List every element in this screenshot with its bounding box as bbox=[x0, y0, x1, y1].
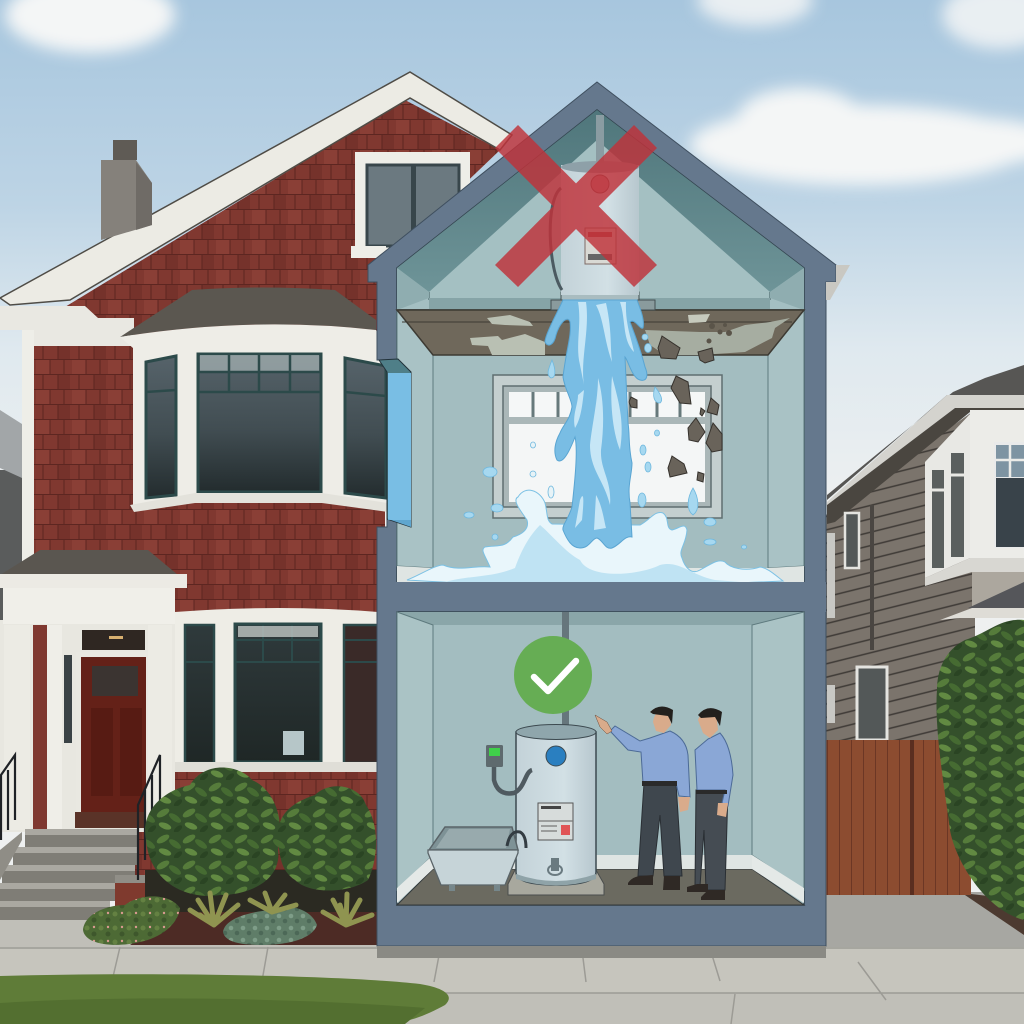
red X mark over attic heater bbox=[495, 125, 657, 287]
lower floor slab band bbox=[387, 582, 826, 612]
leaking side duct bbox=[379, 359, 411, 527]
garden bed shadow and mulch bbox=[130, 870, 378, 945]
splash pool bbox=[407, 490, 783, 586]
main water column bbox=[545, 300, 647, 548]
neighbor bay windows bbox=[925, 410, 1024, 608]
droplets bbox=[464, 334, 746, 549]
ground: sidewalk, driveway and lawn bbox=[0, 892, 1024, 1024]
right neighbor house bbox=[826, 365, 1024, 745]
shirt and arm bbox=[610, 726, 690, 797]
ground floor room bbox=[397, 612, 804, 905]
second technician bbox=[687, 708, 733, 900]
falling debris bbox=[629, 336, 722, 482]
clouds bbox=[5, 0, 1024, 185]
attic window bbox=[351, 152, 470, 258]
neighbor siding wall bbox=[826, 410, 975, 745]
drain pan bbox=[428, 827, 526, 891]
left neighbor house bbox=[0, 410, 24, 770]
window in upper room bbox=[493, 375, 722, 518]
lower bay window bbox=[171, 608, 378, 772]
cutaway shell bbox=[368, 82, 836, 946]
eave detail right bbox=[826, 265, 850, 300]
green check badge bbox=[514, 636, 592, 714]
cracked ceiling bbox=[397, 310, 804, 355]
bay window roof bbox=[120, 288, 376, 337]
water burst from attic bbox=[407, 300, 783, 586]
neighbor porch roof bbox=[968, 582, 1024, 610]
attic room bbox=[397, 110, 804, 310]
wooden fence bbox=[826, 740, 971, 895]
upper gable wall bbox=[33, 100, 500, 345]
downpipe bbox=[870, 505, 874, 650]
eave ledge bbox=[0, 306, 98, 330]
gable roof trim bbox=[0, 72, 512, 305]
neighbor roof and eave bbox=[827, 365, 1024, 500]
main house wall bbox=[33, 340, 385, 895]
water highlights bbox=[574, 302, 634, 530]
skirting bbox=[397, 566, 804, 582]
front garden shrubs bbox=[83, 768, 376, 945]
upper room bbox=[397, 310, 804, 582]
neighbor small windows bbox=[827, 513, 887, 740]
failed water heater in attic bbox=[550, 115, 655, 310]
cutaway section of the house bbox=[368, 82, 850, 958]
front steps bbox=[0, 755, 160, 920]
upper bay window frame bbox=[120, 324, 388, 512]
right hedge bbox=[936, 620, 1024, 920]
main house bbox=[0, 72, 512, 920]
chimney bbox=[101, 140, 152, 240]
entry porch bbox=[0, 550, 187, 832]
technician pointing bbox=[595, 706, 690, 890]
safe water heater bbox=[486, 724, 604, 895]
